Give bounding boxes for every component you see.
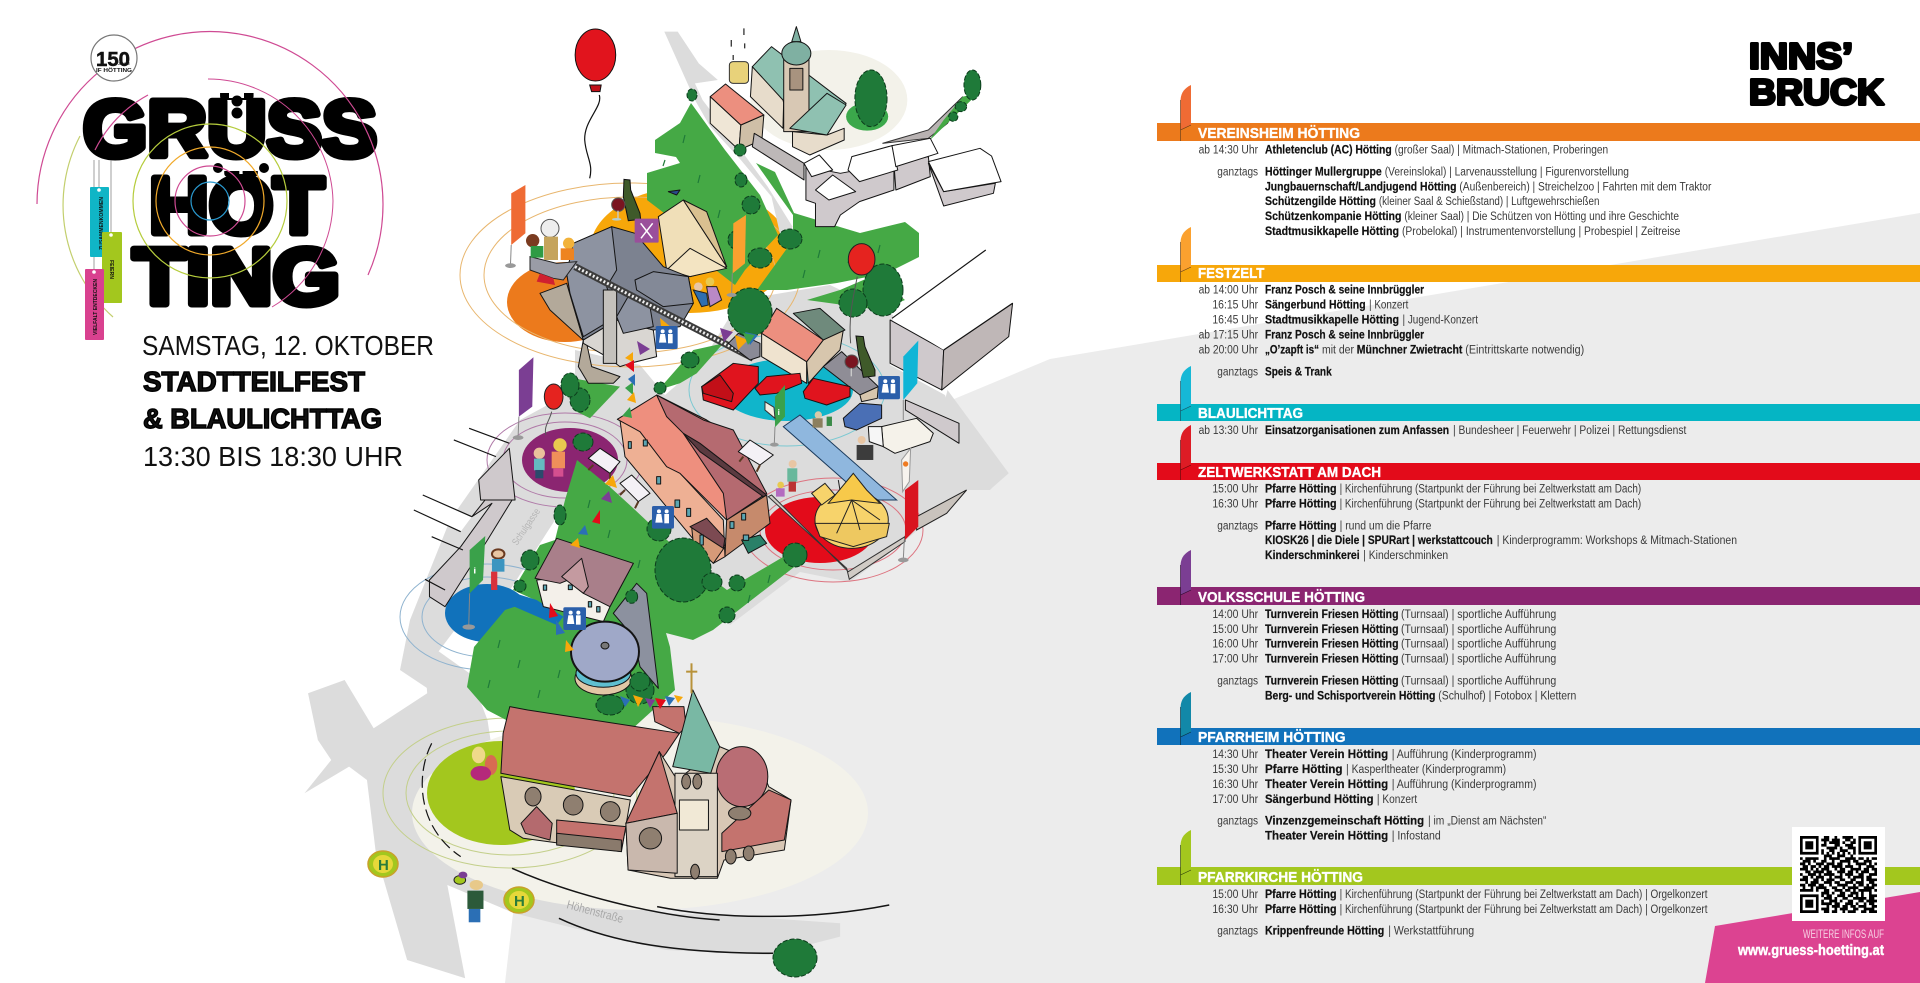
anniversary badge: IF HÖTTING	[96, 67, 132, 74]
bottle and glass: blaulicht	[845, 336, 875, 377]
program: Zeltwerkstatt am Dach	[1157, 425, 1920, 562]
left house	[710, 84, 804, 180]
couple dancing	[693, 277, 722, 307]
bus stop left	[368, 851, 398, 877]
flag green	[1180, 830, 1191, 885]
program: Festzelt	[1157, 227, 1920, 378]
program: Pfarrheim Hötting	[1157, 692, 1920, 842]
program: Blaulichttag: ab 13:30 Uhr	[1199, 425, 1258, 437]
info board white	[765, 402, 775, 418]
heading: FESTZELT	[1198, 266, 1265, 282]
disc: pfarrheim blue	[445, 584, 529, 642]
tag: Feiern: FEIERN	[108, 260, 114, 279]
tag: Vielfalt entdecken: VIELFALT ENTDECKEN	[93, 279, 99, 335]
title: Grüß Hötting wordmark: HÖT	[149, 161, 324, 250]
bus stop right: H	[514, 893, 525, 910]
concentric rings around stations	[383, 183, 923, 868]
program: Volksschule Hötting: 16:00 Uhr	[1212, 639, 1258, 651]
ramp and trees right	[882, 70, 981, 143]
trucks: fire brigade	[702, 363, 850, 410]
program: Pfarrkirche Hötting: 15:00 Uhr	[1212, 889, 1258, 901]
wall and festival tent	[768, 473, 967, 579]
program: Pfarrheim Hötting: ganztags	[1217, 815, 1258, 827]
pull up banner	[902, 448, 911, 492]
cream halo behind main church	[412, 716, 868, 910]
disc: vereinsheim orange	[507, 262, 623, 342]
program: Vereinsheim Hötting	[1157, 85, 1920, 238]
tent: festzelt	[658, 190, 727, 277]
program: Zeltwerkstatt am Dach: | Kirchenführung (Startpunkt der Führung bei Zeltwerkstatt am Dach)	[1340, 484, 1641, 496]
road: hillside path	[664, 32, 793, 247]
program: Zeltwerkstatt am Dach: Pfarre Hötting	[1265, 484, 1337, 496]
path: blue walkway to pfarrheim	[510, 592, 563, 625]
wc icon pfarrheim	[563, 607, 586, 630]
bus stop left: H	[378, 857, 389, 874]
program: Vereinsheim Hötting: Stadtmusikkapelle Hötting	[1265, 226, 1399, 238]
program: Festzelt: Franz Posch & seine Innbrüggler	[1265, 329, 1425, 341]
wc icon blaulicht	[878, 376, 900, 399]
program: Pfarrkirche Hötting: Pfarre Hötting	[1265, 889, 1337, 901]
flag cyan	[1180, 366, 1191, 421]
program: Zeltwerkstatt am Dach: | Kirchenführung (Startpunkt der Führung bei Zeltwerkstatt am Dach)	[1340, 499, 1641, 511]
program: Volksschule Hötting: (Turnsaal) | sportliche Aufführung	[1401, 624, 1556, 636]
balloons	[575, 29, 616, 178]
event details	[142, 330, 434, 472]
top church	[710, 27, 1001, 227]
hero: logo block	[37, 32, 383, 340]
title: Grüß Hötting wordmark: GRÜSS	[83, 84, 377, 173]
program: Festzelt: Speis & Trank	[1265, 366, 1332, 378]
program: Vereinsheim Hötting: Schützenkompanie Hötting	[1265, 211, 1402, 223]
program: Vereinsheim Hötting: (Außenbereich) | Streichelzoo | Fahrten mit dem Traktor	[1459, 181, 1712, 193]
title: Grüß Hötting wordmark: TING	[133, 232, 340, 321]
header bar blue	[1157, 728, 1920, 745]
program: Pfarrheim Hötting: | Kasperltheater (Kinderprogramm)	[1346, 764, 1506, 776]
program: Pfarrkirche Hötting: 16:30 Uhr	[1212, 904, 1258, 916]
program: Pfarrheim Hötting: 14:30 Uhr	[1212, 749, 1258, 761]
heading: PFARRHEIM HÖTTING	[1198, 729, 1346, 746]
program: Vereinsheim Hötting: Jungbauernschaft/Landjugend Hötting	[1265, 181, 1456, 193]
program: Vereinsheim Hötting: (kleiner Saal) | Die Schützen von Hötting und ihre Geschichte	[1404, 211, 1679, 223]
program: Festzelt: Franz Posch & seine Innbrüggler	[1265, 285, 1425, 297]
tag: Feiern	[102, 232, 122, 303]
disc: pfarrkirche green	[427, 741, 575, 845]
disc: volksschule purple	[522, 428, 618, 492]
program: Festzelt: | Konzert	[1369, 300, 1409, 312]
balloon left	[544, 384, 563, 435]
background: light grey diagonal area	[505, 213, 1920, 983]
info flag schoolyard	[462, 536, 485, 630]
disc: blaulicht cyan	[721, 359, 853, 421]
info flag green	[770, 385, 785, 447]
program: Zeltwerkstatt am Dach: | Kinderprogramm: Workshops & Mitmach-Stationen	[1497, 535, 1737, 547]
top tree	[846, 70, 888, 131]
info flag green: i	[778, 408, 780, 417]
disc: zeltwerkstatt red	[765, 497, 875, 563]
wc icon school	[652, 506, 674, 529]
program: Pfarrheim Hötting: Theater Verein Hötting	[1265, 779, 1388, 791]
program: Volksschule Hötting: 15:00 Uhr	[1212, 624, 1258, 636]
map illustration	[304, 27, 1013, 978]
program: Vereinsheim Hötting: (großer Saal) | Mitmach-Stationen, Proberingen	[1395, 144, 1608, 156]
program: Volksschule Hötting	[1157, 550, 1920, 702]
program: Pfarrheim Hötting: Theater Verein Hötting	[1265, 830, 1388, 842]
program: Festzelt: Sängerbund Hötting	[1265, 300, 1366, 312]
road kerb lines	[422, 743, 889, 953]
program: Volksschule Hötting: (Turnsaal) | sportliche Aufführung	[1401, 639, 1556, 651]
white buildings left	[371, 480, 512, 607]
trees: plaza and hill	[514, 89, 903, 977]
program: Festzelt: (Eintrittskarte notwendig)	[1465, 344, 1584, 356]
icon: food purple	[635, 219, 659, 243]
building: main church	[501, 663, 791, 879]
boy on bike	[491, 549, 504, 590]
flag gold	[1180, 227, 1191, 282]
program: Volksschule Hötting: Turnverein Friesen Hötting	[1265, 624, 1398, 636]
program: Zeltwerkstatt am Dach: 16:30 Uhr	[1212, 499, 1258, 511]
program: Vereinsheim Hötting: Athletenclub (AC) Hötting	[1265, 144, 1392, 156]
program: Pfarrkirche Hötting: Pfarre Hötting	[1265, 904, 1337, 916]
gold feather flag	[727, 215, 746, 297]
bus stop right	[504, 887, 534, 913]
program: Festzelt: Münchner Zwietracht	[1357, 344, 1463, 356]
building: volksschule annex	[535, 538, 633, 622]
program: Blaulichttag: Einsatzorganisationen zum Anfassen	[1265, 425, 1449, 437]
white buildings left upper	[454, 428, 515, 500]
program: Volksschule Hötting: (Turnsaal) | sportliche Aufführung	[1401, 609, 1556, 621]
title: Grüß Hötting wordmark	[83, 84, 377, 321]
anniversary badge	[91, 35, 137, 81]
program: Pfarrkirche Hötting: ganztags	[1217, 926, 1258, 938]
program: Festzelt: ab 14:00 Uhr	[1199, 285, 1258, 297]
footer text: www.gruess-hoetting.at	[1737, 942, 1884, 959]
program: Pfarrkirche Hötting: | Kirchenführung (Startpunkt der Führung bei Zeltwerkstatt am Dach) | Orgelkonzert	[1340, 904, 1708, 916]
heading: VOLKSSCHULE HÖTTING	[1198, 589, 1365, 606]
program: Pfarrkirche Hötting: | Kirchenführung (Startpunkt der Führung bei Zeltwerkstatt am Dach) | Orgelkonzert	[1340, 889, 1708, 901]
heading: PFARRKIRCHE HÖTTING	[1198, 869, 1363, 886]
lawn: central and lower hill	[467, 343, 807, 740]
big red balloon	[575, 29, 616, 178]
program: Pfarrkirche Hötting: Krippenfreunde Hötting	[1265, 926, 1384, 938]
toilet icons	[656, 326, 900, 399]
anniversary badge: 150	[96, 49, 130, 71]
building: fire station	[728, 308, 878, 402]
program: Pfarrheim Hötting: 17:00 Uhr	[1212, 794, 1258, 806]
top church halo	[750, 50, 907, 150]
wc icon vereinsheim	[656, 326, 678, 349]
footer text: WEITERE INFOS AUF	[1803, 929, 1884, 941]
qr code	[1792, 827, 1885, 921]
footer: magenta corner	[1705, 892, 1920, 983]
program: Vereinsheim Hötting: (Vereinslokal) | Larvenausstellung | Figurenvorstellung	[1385, 166, 1629, 178]
date: SAMSTAG, 12. OKTOBER	[142, 330, 434, 361]
program: Festzelt: „O’zapft is“	[1265, 344, 1319, 356]
tag: Zusammenkommen	[90, 187, 109, 257]
program: Pfarrheim Hötting: | im „Dienst am Nächsten“	[1428, 815, 1547, 827]
info flag schoolyard: i	[473, 567, 476, 576]
program: Festzelt: Stadtmusikkapelle Hötting	[1265, 315, 1399, 327]
program: Pfarrheim Hötting: Pfarre Hötting	[1265, 764, 1342, 776]
program: Blaulichttag	[1157, 366, 1920, 437]
program: Volksschule Hötting: 14:00 Uhr	[1212, 609, 1258, 621]
program: Pfarrheim Hötting: | Aufführung (Kinderprogramm)	[1392, 779, 1537, 791]
tag: Zusammenkommen: ZUSAMMENKOMMEN	[99, 197, 105, 250]
program: Pfarrheim Hötting: 16:30 Uhr	[1212, 779, 1258, 791]
anniversary badge: JAHRE	[118, 62, 131, 66]
program: Blaulichttag: | Bundesheer | Feuerwehr | Polizei | Rettungsdienst	[1453, 425, 1687, 437]
flag orange	[1180, 85, 1191, 141]
ladder	[575, 267, 753, 358]
program: Pfarrkirche Hötting	[1157, 830, 1920, 938]
program: Volksschule Hötting: Turnverein Friesen Hötting	[1265, 675, 1398, 687]
building: pfarrheim rotunda	[571, 583, 658, 695]
building: vereinsheim grey	[540, 227, 753, 383]
heading: VEREINSHEIM HÖTTING	[1198, 125, 1360, 142]
logo: Innsbruck: INNS’	[1749, 36, 1853, 76]
program: Pfarrheim Hötting: Vinzenzgemeinschaft Hötting	[1265, 815, 1424, 827]
program: Zeltwerkstatt am Dach: 15:00 Uhr	[1212, 484, 1258, 496]
program: Volksschule Hötting: Berg- und Schisportverein Hötting	[1265, 690, 1435, 702]
red feather flag	[898, 480, 918, 562]
footer text	[1737, 929, 1884, 959]
balloon right	[848, 244, 875, 343]
white buildings upper	[804, 138, 1001, 227]
program: Volksschule Hötting: Turnverein Friesen Hötting	[1265, 609, 1398, 621]
program: Zeltwerkstatt am Dach: ganztags	[1217, 520, 1258, 532]
flag purple	[1180, 550, 1191, 605]
program: Zeltwerkstatt am Dach: | rund um die Pfarre	[1340, 520, 1431, 532]
program: Volksschule Hötting: 17:00 Uhr	[1212, 654, 1258, 666]
program: Festzelt: ab 20:00 Uhr	[1199, 344, 1258, 356]
program: Pfarrheim Hötting: | Konzert	[1377, 794, 1418, 806]
purple feather flag	[513, 357, 533, 440]
program: Zeltwerkstatt am Dach: Kinderschminkerei	[1265, 550, 1360, 562]
bus stops	[368, 851, 534, 913]
program: Zeltwerkstatt am Dach: Pfarre Hötting	[1265, 499, 1337, 511]
program: Pfarrheim Hötting: | Infostand	[1392, 830, 1441, 842]
road: walkway blue	[783, 415, 897, 500]
event name line 1: STADTTEILFEST	[143, 366, 365, 397]
police car and ambulance	[843, 403, 933, 453]
header bar red	[1157, 463, 1920, 480]
people near plaza	[776, 411, 873, 497]
flag red	[1180, 425, 1191, 480]
hanging tags	[85, 160, 122, 340]
flag teal	[1180, 692, 1191, 745]
program: Zeltwerkstatt am Dach: | Kinderschminken	[1363, 550, 1448, 562]
program: Volksschule Hötting: Turnverein Friesen Hötting	[1265, 654, 1398, 666]
program: Festzelt: mit der	[1322, 344, 1354, 356]
program: Festzelt: ab 17:15 Uhr	[1199, 329, 1258, 341]
family with pram	[471, 747, 497, 781]
time: 13:30 BIS 18:30 UHR	[143, 441, 403, 472]
choir singers and notes	[729, 28, 749, 83]
fire ladder basket with people	[526, 219, 577, 285]
kids at volksschule	[534, 438, 567, 478]
program: Pfarrheim Hötting: 15:30 Uhr	[1212, 764, 1258, 776]
program: Vereinsheim Hötting: Höttinger Mullergruppe	[1265, 166, 1382, 178]
header bar gold	[1157, 265, 1920, 282]
header bar green	[1157, 867, 1920, 885]
man with balloon ice cream	[454, 872, 483, 922]
umlaut slot mask	[229, 91, 244, 98]
program: Vereinsheim Hötting: Schützengilde Hötting	[1265, 196, 1376, 208]
concentric rings	[37, 32, 383, 317]
umlaut dots	[213, 96, 269, 173]
program: Festzelt: | Jugend-Konzert	[1402, 315, 1479, 327]
program: Vereinsheim Hötting: ab 14:30 Uhr	[1199, 144, 1258, 156]
program: Pfarrheim Hötting: Sängerbund Hötting	[1265, 794, 1374, 806]
bottle and wine glass: festzelt	[612, 179, 641, 221]
program: Pfarrkirche Hötting: | Werkstattführung	[1388, 926, 1474, 938]
church nave and tower	[750, 27, 846, 155]
road and plaza shadows	[304, 285, 1009, 978]
program: Vereinsheim Hötting: (kleiner Saal & Schießstand) | Luftgewehrschießen	[1379, 196, 1599, 208]
program: Volksschule Hötting: Turnverein Friesen Hötting	[1265, 639, 1398, 651]
street label: Schulgasse: Schulgasse	[510, 506, 543, 548]
bunting flags	[549, 318, 758, 709]
program: Zeltwerkstatt am Dach: Pfarre Hötting	[1265, 520, 1337, 532]
heading: ZELTWERKSTATT AM DACH	[1198, 465, 1381, 481]
tag: Vielfalt entdecken	[85, 269, 104, 340]
program: Festzelt: ganztags	[1217, 366, 1258, 378]
header bar orange	[1157, 123, 1920, 141]
program: Volksschule Hötting: (Turnsaal) | sportliche Aufführung	[1401, 654, 1556, 666]
program: Volksschule Hötting: (Turnsaal) | sportliche Aufführung	[1401, 675, 1556, 687]
disc: festzelt gold	[590, 187, 790, 313]
header bar cyan	[1157, 404, 1920, 421]
lawn: upper hill	[647, 103, 919, 310]
white buildings right	[890, 250, 1013, 443]
program: Pfarrheim Hötting: Theater Verein Hötting	[1265, 749, 1388, 761]
logo: Innsbruck	[1749, 36, 1884, 112]
program: Vereinsheim Hötting: ganztags	[1217, 166, 1258, 178]
heading: BLAULICHTTAG	[1198, 406, 1303, 422]
program: Festzelt: 16:15 Uhr	[1212, 300, 1258, 312]
orange feather flag	[505, 185, 525, 268]
program: Vereinsheim Hötting: (Probelokal) | Instrumentenvorstellung | Probespiel | Zeitreise	[1402, 226, 1680, 238]
building: large school house	[617, 395, 770, 563]
program: Volksschule Hötting: (Schulhof) | Fotobox | Klettern	[1438, 690, 1576, 702]
cyan feather flag	[903, 341, 918, 420]
street label: Höhenstraße: Höhenstraße	[565, 897, 625, 926]
feather flags	[505, 185, 533, 440]
event name line 2: & BLAULICHTTAG	[143, 403, 382, 434]
program: Volksschule Hötting: ganztags	[1217, 675, 1258, 687]
picnic tables	[588, 440, 773, 508]
program: Pfarrheim Hötting: | Aufführung (Kinderprogramm)	[1392, 749, 1537, 761]
program: Zeltwerkstatt am Dach: KIOSK26 | die Diele | SPURart | werkstattcouch	[1265, 535, 1493, 547]
program: Festzelt: 16:45 Uhr	[1212, 315, 1258, 327]
header bar purple	[1157, 587, 1920, 605]
logo: Innsbruck: BRUCK	[1749, 72, 1884, 112]
